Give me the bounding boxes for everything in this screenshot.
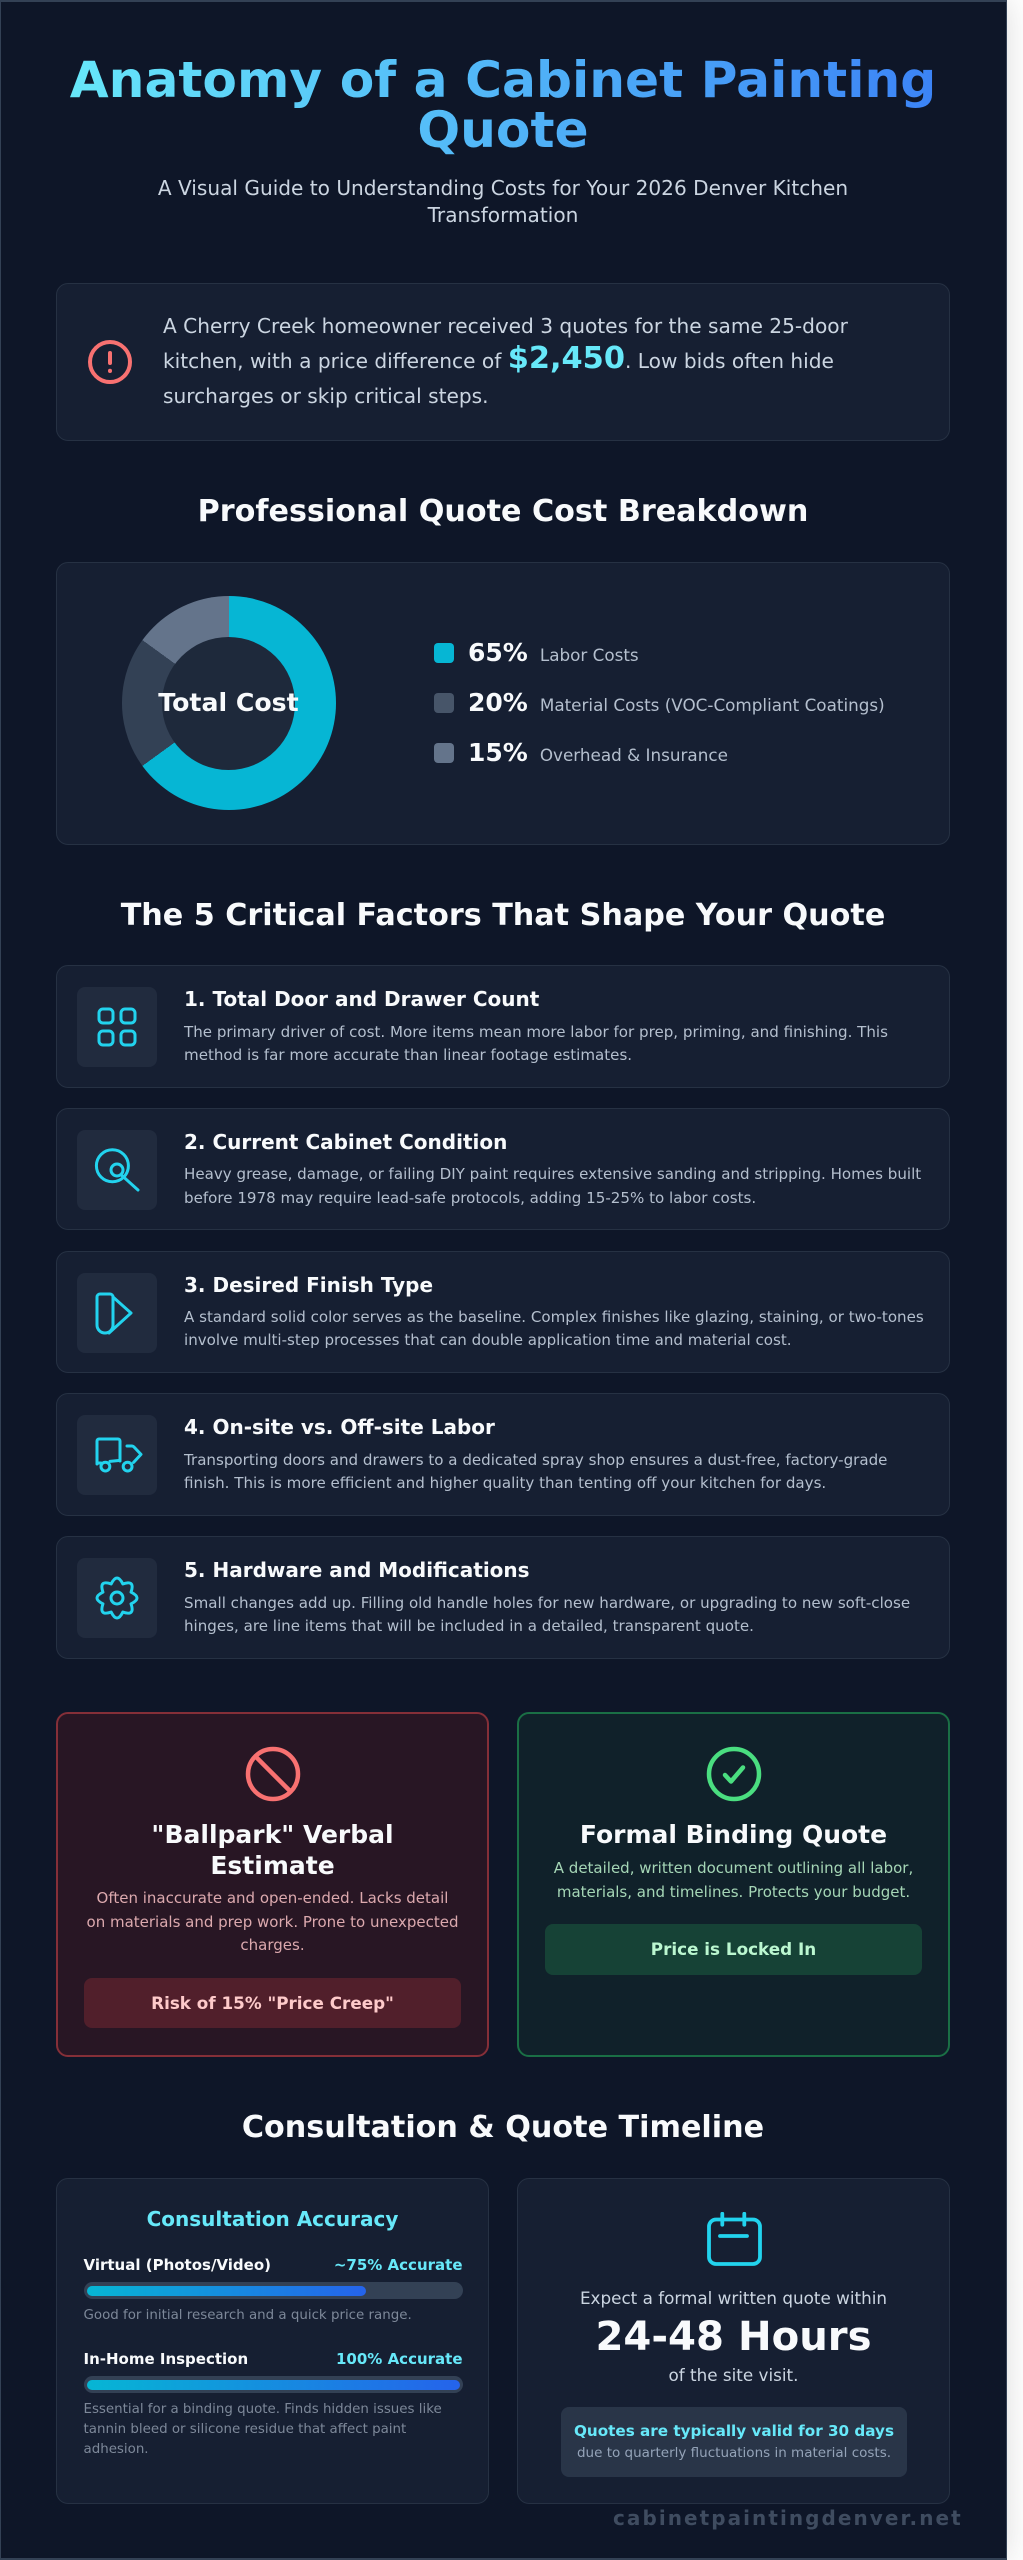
factor 5 description — [184, 1594, 910, 1635]
title: Anatomy of a Cabinet Painting — [70, 50, 936, 109]
validity headline: Quotes are typically valid for 30 days — [574, 2422, 894, 2440]
panel: factor 2 — [56, 1108, 950, 1230]
factor 1 title: 1. Total Door and Drawer Count — [184, 987, 539, 1011]
panel: cost breakdown — [56, 562, 950, 845]
binding quote title: Formal Binding Quote — [580, 1820, 887, 1849]
panel: factor 5 — [56, 1536, 950, 1659]
factor 3 description: involve multi-step processes that can double application time and material cost. — [184, 1331, 792, 1349]
alert text: surcharges or skip critical steps. — [163, 384, 489, 408]
factor 2 description — [184, 1165, 921, 1207]
subtitle: Transformation — [428, 203, 578, 227]
factor 5 title: 5. Hardware and Modifications — [184, 1558, 530, 1582]
binding quote description — [554, 1859, 913, 1900]
virtual progress bar — [84, 2282, 462, 2299]
factor 1 description — [184, 1023, 888, 1064]
factor 2 title: 2. Current Cabinet Condition — [184, 1130, 507, 1154]
timeline intro: Expect a formal written quote within — [580, 2288, 887, 2308]
legend — [434, 638, 885, 767]
badge: price creep — [84, 1978, 461, 2028]
heading: cost breakdown: Professional Quote Cost Breakdown — [198, 494, 808, 529]
factor 5 description: hinges, are line items that will be included in a detailed, transparent quote. — [184, 1617, 754, 1635]
accuracy heading: Consultation Accuracy — [147, 2207, 398, 2231]
icon: calendar — [707, 2212, 762, 2266]
factor 1 description: method is far more accurate than linear footage estimates. — [184, 1046, 632, 1064]
legend row: material: 20% Material Costs (VOC-Compliant Coatings) — [468, 688, 885, 717]
verbal estimate title: Estimate — [210, 1851, 335, 1880]
panel: quote timeline — [517, 2178, 950, 2504]
title: Quote — [417, 100, 589, 159]
panel: binding quote — [517, 1712, 950, 2057]
panel: alert callout — [56, 283, 950, 441]
validity detail: due to quarterly fluctuations in material costs. — [577, 2445, 891, 2461]
heading: critical factors: The 5 Critical Factors That Shape Your Quote — [121, 898, 885, 933]
factor 5 description: Small changes add up. Filling old handle holes for new hardware, or upgrading to new soft-close — [184, 1594, 910, 1612]
legend row: labor: 65% Labor Costs — [468, 638, 639, 667]
icon: check circle — [706, 1746, 762, 1802]
verbal estimate description: on materials and prep work. Prone to unexpected — [87, 1912, 458, 1930]
badge: price locked — [545, 1924, 922, 1975]
in-home note: tannin bleed or silicone residue that affect paint — [84, 2422, 406, 2437]
verbal estimate title: "Ballpark" Verbal — [151, 1820, 394, 1849]
panel: factor 1 — [56, 965, 950, 1088]
subtitle: A Visual Guide to Understanding Costs for Your 2026 Denver Kitchen — [158, 176, 848, 200]
in-home label: In-Home Inspection — [84, 2350, 248, 2368]
timeline outro: of the site visit. — [669, 2365, 798, 2385]
watermark: cabinetpaintingdenver.net — [613, 2506, 963, 2530]
in-home note: adhesion. — [84, 2442, 149, 2457]
validity note — [561, 2407, 907, 2477]
swatch: overhead — [434, 743, 454, 763]
donut center label: Total Cost — [158, 688, 299, 717]
verbal estimate title — [151, 1820, 394, 1880]
factor 3 description — [184, 1308, 924, 1349]
factor 4 description: finish. This is more efficient and higher quality than tenting off your kitchen for days. — [184, 1474, 826, 1492]
alert text: kitchen, with a price difference of $2,450. Low bids often hide — [163, 341, 834, 376]
factor 4 description — [184, 1451, 887, 1492]
swatch: material — [434, 693, 454, 713]
icon: gear — [77, 1558, 157, 1638]
icon: finish swatch — [77, 1273, 157, 1353]
row: virtual — [84, 2256, 463, 2323]
icon: prohibited — [246, 1746, 300, 1802]
virtual note: Good for initial research and a quick price range. — [84, 2308, 412, 2323]
badge: price locked: Price is Locked In — [651, 1939, 816, 1959]
panel: factor 3 — [56, 1251, 950, 1373]
factor 4 title: 4. On-site vs. Off-site Labor — [184, 1415, 495, 1439]
factor 2 description: Heavy grease, damage, or failing DIY paint requires extensive sanding and stripping. Homes built — [184, 1165, 921, 1183]
virtual label: Virtual (Photos/Video) — [84, 2256, 271, 2274]
factor 1 description: The primary driver of cost. More items mean more labor for prep, priming, and finishing. This — [184, 1023, 888, 1041]
panel: verbal estimate — [56, 1712, 489, 2057]
icon: magnifier — [77, 1130, 157, 1210]
binding quote description: A detailed, written document outlining all labor, — [554, 1859, 913, 1877]
swatch: labor — [434, 643, 454, 663]
in-home accuracy value: 100% Accurate — [336, 2350, 462, 2368]
stat: turnaround: 24-48 Hours — [595, 2314, 872, 2360]
badge: price creep: Risk of 15% "Price Creep" — [151, 1993, 394, 2013]
legend row: overhead: 15% Overhead & Insurance — [468, 738, 728, 767]
verbal estimate description: charges. — [240, 1936, 305, 1954]
in-home progress bar — [84, 2376, 462, 2393]
alert text — [163, 314, 848, 408]
in-home note: Essential for a binding quote. Finds hidden issues like — [84, 2402, 442, 2417]
alert text: A Cherry Creek homeowner received 3 quotes for the same 25-door — [163, 314, 848, 338]
factor 3 description: A standard solid color serves as the baseline. Complex finishes like glazing, staining, or two-tones — [184, 1308, 924, 1326]
factor 3 title: 3. Desired Finish Type — [184, 1273, 433, 1297]
virtual accuracy value: ~75% Accurate — [334, 2256, 462, 2274]
binding quote description: materials, and timelines. Protects your budget. — [557, 1882, 910, 1900]
panel: consultation accuracy — [56, 2178, 489, 2504]
verbal estimate description: Often inaccurate and open-ended. Lacks detail — [97, 1889, 448, 1907]
in-home note — [84, 2402, 442, 2457]
verbal estimate description — [87, 1889, 458, 1954]
donut chart — [122, 596, 336, 810]
title — [56, 55, 950, 155]
heading: timeline: Consultation & Quote Timeline — [242, 2110, 764, 2145]
icon: door grid — [77, 987, 157, 1067]
row: in-home — [84, 2350, 463, 2457]
factor 4 description: Transporting doors and drawers to a dedicated spray shop ensures a dust-free, factory-grade — [184, 1451, 887, 1469]
subtitle — [158, 176, 848, 227]
icon: warning circle — [88, 340, 132, 384]
panel: factor 4 — [56, 1393, 950, 1516]
donut hole — [162, 636, 295, 770]
factor 2 description: before 1978 may require lead-safe protocols, adding 15-25% to labor costs. — [184, 1189, 756, 1207]
icon: truck — [77, 1415, 157, 1495]
